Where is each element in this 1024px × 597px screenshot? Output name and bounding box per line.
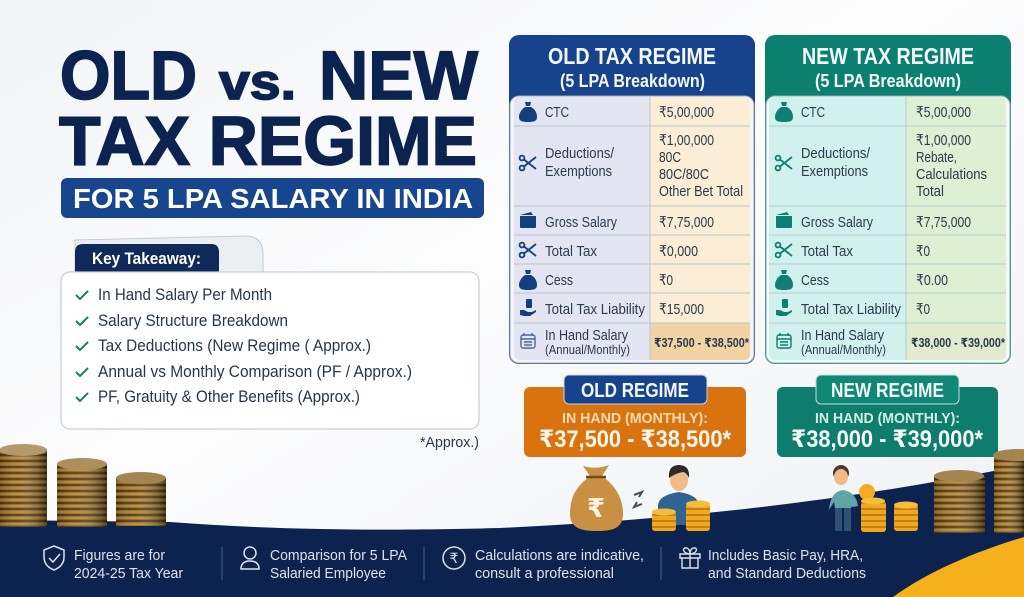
approx note: *Approx.) bbox=[420, 434, 479, 451]
new table labels: In Hand Salary bbox=[801, 327, 884, 344]
new table labels: CTC bbox=[801, 104, 825, 121]
old panel heading bbox=[548, 43, 716, 91]
new table cells bbox=[769, 97, 1006, 360]
new table labels: Total Tax bbox=[801, 243, 853, 260]
old table labels: In Hand Salary bbox=[545, 327, 628, 344]
old table labels: Total Tax Liability bbox=[545, 301, 645, 318]
new table values: ₹38,000 - ₹39,000* bbox=[911, 336, 1005, 350]
navy footer wave bbox=[0, 465, 1024, 597]
old table values: ₹0,000 bbox=[659, 243, 698, 260]
old table labels: Exemptions bbox=[545, 163, 612, 180]
card: old regime in hand bbox=[524, 375, 746, 457]
old table labels: Deductions/ bbox=[545, 145, 615, 162]
tab: key takeaway heading: Key Takeaway: bbox=[92, 249, 201, 268]
old panel frame bbox=[509, 35, 755, 364]
footer item: inclusions: Includes Basic Pay, HRA, bbox=[708, 547, 863, 564]
old table cells bbox=[514, 97, 750, 360]
takeaway list: Salary Structure Breakdown bbox=[98, 311, 288, 330]
old regime tab bbox=[564, 375, 707, 404]
new table values: ₹1,00,000 bbox=[916, 132, 971, 149]
new table labels: Exemptions bbox=[801, 163, 868, 180]
old table values: Other Bet Total bbox=[659, 183, 743, 200]
new regime tab: NEW REGIME bbox=[831, 380, 944, 402]
yellow corner bbox=[893, 537, 1024, 597]
takeaway list box bbox=[61, 272, 479, 429]
footer item: employee: Salaried Employee bbox=[270, 565, 386, 582]
title: OLD bbox=[60, 37, 197, 114]
new table labels: Total Tax Liability bbox=[801, 301, 901, 318]
footer item: inclusions bbox=[680, 547, 866, 582]
new regime tab bbox=[816, 375, 959, 404]
footer item: tax year: Figures are for bbox=[74, 547, 165, 564]
old table values: ₹37,500 - ₹38,500* bbox=[654, 336, 749, 350]
old table labels: CTC bbox=[545, 104, 569, 121]
takeaway list: Tax Deductions (New Regime ( Approx.) bbox=[98, 336, 371, 355]
old table labels: (Annual/Monthly) bbox=[545, 343, 630, 357]
title: vs. bbox=[219, 54, 296, 110]
new table values: ₹0 bbox=[916, 301, 930, 318]
new table icons bbox=[775, 102, 793, 348]
footer item: inclusions: and Standard Deductions bbox=[708, 565, 866, 582]
subtitle banner: FOR 5 LPA SALARY IN INDIA bbox=[73, 183, 473, 214]
card: new regime in hand bbox=[777, 375, 998, 457]
tab backing bbox=[75, 236, 263, 272]
new table labels: (Annual/Monthly) bbox=[801, 343, 886, 357]
new table values: ₹5,00,000 bbox=[916, 104, 971, 121]
coin stacks right bbox=[934, 449, 1024, 533]
tab: key takeaway heading bbox=[75, 244, 219, 272]
old table values: ₹1,00,000 bbox=[659, 132, 714, 149]
footer item: indicative: ₹ bbox=[450, 550, 459, 566]
coin stacks left bbox=[0, 444, 166, 527]
new panel heading bbox=[802, 43, 974, 91]
title: TAX REGIME bbox=[59, 102, 477, 180]
old table values: 80C/80C bbox=[659, 166, 709, 183]
new table labels: Gross Salary bbox=[801, 214, 873, 231]
card: new regime in hand: IN HAND (MONTHLY): bbox=[815, 410, 960, 427]
old table values: ₹15,000 bbox=[659, 301, 704, 318]
footer item: employee bbox=[241, 547, 407, 582]
old panel heading: (5 LPA Breakdown) bbox=[560, 71, 705, 91]
new table values: Rebate, bbox=[916, 149, 957, 166]
panel: key takeaway bbox=[61, 236, 479, 429]
takeaway list: Annual vs Monthly Comparison (PF / Approx.) bbox=[98, 362, 412, 381]
icon: money bag: ₹ bbox=[587, 493, 605, 523]
old panel heading: OLD TAX REGIME bbox=[548, 43, 716, 69]
old table values: ₹5,00,000 bbox=[659, 104, 714, 121]
new table values: Total bbox=[916, 183, 944, 200]
footer item: indicative: consult a professional bbox=[475, 565, 614, 582]
new table labels: Cess bbox=[801, 272, 829, 289]
new table values bbox=[911, 104, 1005, 350]
old table values bbox=[654, 104, 749, 350]
old table labels: Gross Salary bbox=[545, 214, 617, 231]
new table labels: Deductions/ bbox=[801, 145, 871, 162]
old table labels bbox=[545, 104, 645, 357]
takeaway list bbox=[76, 285, 412, 406]
new panel frame bbox=[765, 35, 1011, 364]
card: old regime in hand: IN HAND (MONTHLY): bbox=[562, 410, 708, 427]
takeaway list: In Hand Salary Per Month bbox=[98, 285, 272, 304]
old table values: ₹0 bbox=[659, 272, 673, 289]
card: old regime in hand: ₹37,500 - ₹38,500* bbox=[539, 426, 732, 453]
old table labels: Total Tax bbox=[545, 243, 597, 260]
footer item: indicative: Calculations are indicative, bbox=[475, 547, 644, 564]
old regime tab: OLD REGIME bbox=[581, 380, 689, 402]
new table values: Calculations bbox=[916, 166, 987, 183]
new table values: ₹7,75,000 bbox=[916, 214, 971, 231]
old table icons bbox=[519, 102, 537, 348]
panel: old tax regime bbox=[509, 35, 755, 364]
icon: person with coins bbox=[652, 465, 710, 531]
takeaway list: PF, Gratuity & Other Benefits (Approx.) bbox=[98, 387, 360, 406]
icon: person with coin stacks bbox=[829, 465, 918, 532]
footer item: tax year bbox=[44, 546, 183, 582]
footer item: tax year: 2024-25 Tax Year bbox=[74, 565, 183, 582]
new table values: ₹0.00 bbox=[916, 272, 948, 289]
footer item: employee: Comparison for 5 LPA bbox=[270, 547, 407, 564]
footer item: indicative bbox=[443, 547, 644, 582]
icon: exchange arrows bbox=[634, 492, 642, 507]
panel: new tax regime bbox=[765, 35, 1011, 364]
old table labels: Cess bbox=[545, 272, 573, 289]
old table values: 80C bbox=[659, 149, 681, 166]
footer notes bbox=[44, 546, 866, 582]
new panel heading: NEW TAX REGIME bbox=[802, 43, 974, 69]
new table labels bbox=[801, 104, 901, 357]
card: new regime in hand: ₹38,000 - ₹39,000* bbox=[791, 426, 984, 453]
title: NEW bbox=[319, 37, 479, 114]
new table values: ₹0 bbox=[916, 243, 930, 260]
old table values: ₹7,75,000 bbox=[659, 214, 714, 231]
title bbox=[59, 37, 479, 180]
new panel heading: (5 LPA Breakdown) bbox=[815, 71, 961, 91]
icon: money bag bbox=[570, 465, 623, 531]
